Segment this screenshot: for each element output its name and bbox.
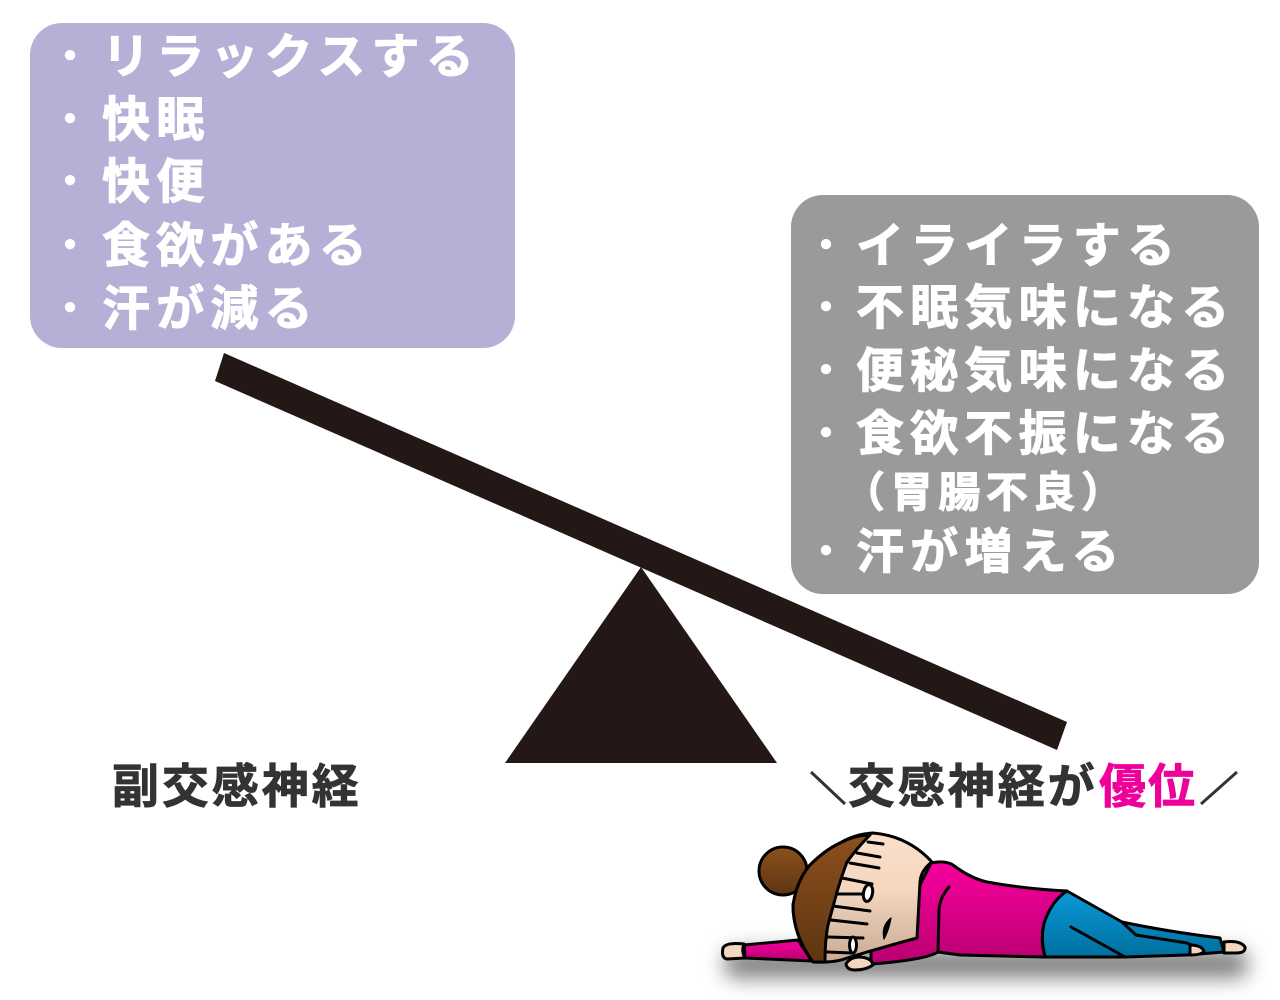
list: parasympathetic effects: ・ (50, 160, 90, 204)
hand under head (846, 957, 873, 970)
right slash (1201, 772, 1237, 804)
list: parasympathetic effects: リラックスする (102, 31, 480, 84)
back foot (1224, 942, 1245, 953)
panel: parasympathetic effects (30, 23, 515, 348)
label: sympathetic dominant (811, 760, 1237, 813)
front foot (1190, 945, 1204, 955)
highlight: dominant: 優位 (1099, 760, 1197, 813)
seesaw beam (215, 353, 1067, 750)
list: parasympathetic effects: 快便 (102, 156, 210, 209)
list: parasympathetic effects: 快眠 (102, 94, 210, 147)
list: sympathetic effects: 便秘気味になる (856, 345, 1235, 398)
label: parasympathetic: 副交感神経 (112, 760, 362, 813)
list: parasympathetic effects (50, 31, 480, 336)
list: sympathetic effects: 不眠気味になる (856, 282, 1235, 335)
mouth (883, 918, 891, 939)
list: sympathetic effects (806, 220, 1235, 579)
list: parasympathetic effects: ・ (50, 287, 90, 331)
label: sympathetic dominant: 交感神経が (848, 760, 1098, 813)
list: sympathetic effects: （胃腸不良） (843, 469, 1129, 516)
list: sympathetic effects: 汗が増える (856, 526, 1126, 579)
list: sympathetic effects: イライラする (856, 220, 1181, 273)
list: sympathetic effects: ・ (806, 224, 846, 268)
left arm (744, 940, 812, 961)
hair bun (759, 847, 807, 895)
list: sympathetic effects: ・ (806, 412, 846, 456)
list: sympathetic effects: ・ (806, 286, 846, 330)
fringe lines (827, 842, 883, 953)
list: parasympathetic effects: ・ (50, 35, 90, 79)
illustration: woman lying on the floor (722, 833, 1248, 978)
hair fringe (793, 835, 870, 962)
floor shadow (724, 950, 1248, 978)
left slash (811, 772, 845, 804)
list: sympathetic effects: ・ (806, 530, 846, 574)
list: sympathetic effects: ・ (806, 349, 846, 393)
legs (1042, 891, 1224, 957)
list: parasympathetic effects: 食欲がある (102, 220, 373, 273)
list: parasympathetic effects: ・ (50, 98, 90, 142)
head (793, 833, 932, 962)
left hand (722, 944, 745, 959)
seesaw fulcrum (505, 567, 777, 763)
eyes (862, 884, 874, 902)
list: parasympathetic effects: ・ (50, 224, 90, 268)
torso (871, 862, 1067, 964)
list: sympathetic effects: 食欲不振になる (856, 408, 1235, 461)
list: parasympathetic effects: 汗が減る (102, 283, 319, 336)
panel: sympathetic effects (791, 195, 1259, 594)
